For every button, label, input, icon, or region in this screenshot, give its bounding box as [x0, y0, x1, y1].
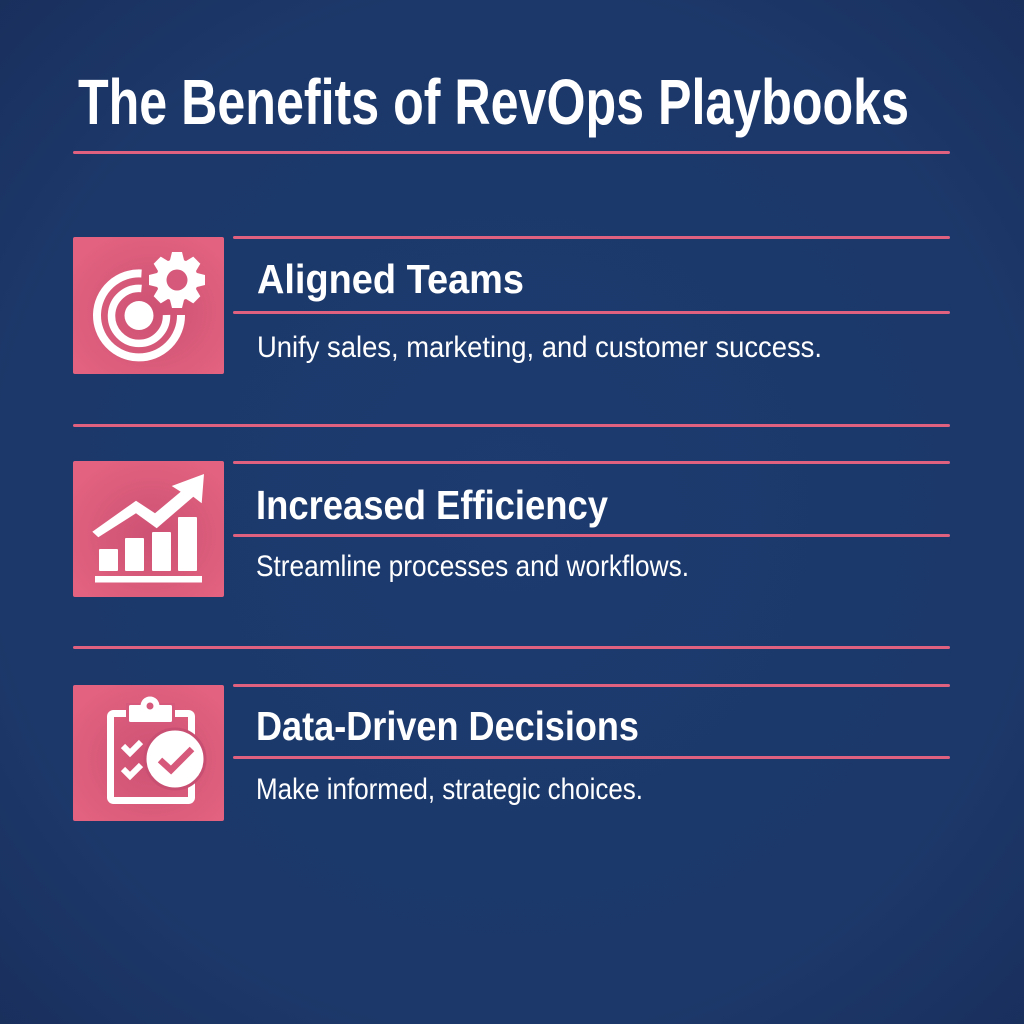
heading rule top [233, 461, 950, 464]
title underline [73, 151, 950, 154]
description: Make informed, strategic choices. [256, 773, 643, 806]
icon: clipboard with check [73, 685, 224, 821]
icon: target and gear [73, 237, 224, 374]
heading rule top [233, 684, 950, 687]
panel: aligned teams [73, 236, 950, 374]
description: Streamline processes and workflows. [256, 550, 689, 583]
heading rule top [233, 236, 950, 239]
panel: data-driven decisions [73, 684, 950, 821]
panel: increased efficiency [73, 461, 950, 597]
heading: data-driven decisions: Data-Driven Decisions [256, 703, 639, 749]
icon: growth chart [73, 461, 224, 597]
heading: increased efficiency: Increased Efficiency [256, 482, 608, 528]
heading: aligned teams: Aligned Teams [257, 256, 524, 302]
heading rule bottom [233, 311, 950, 314]
description: Unify sales, marketing, and customer success. [257, 331, 822, 364]
heading rule bottom [233, 534, 950, 537]
heading rule bottom [233, 756, 950, 759]
